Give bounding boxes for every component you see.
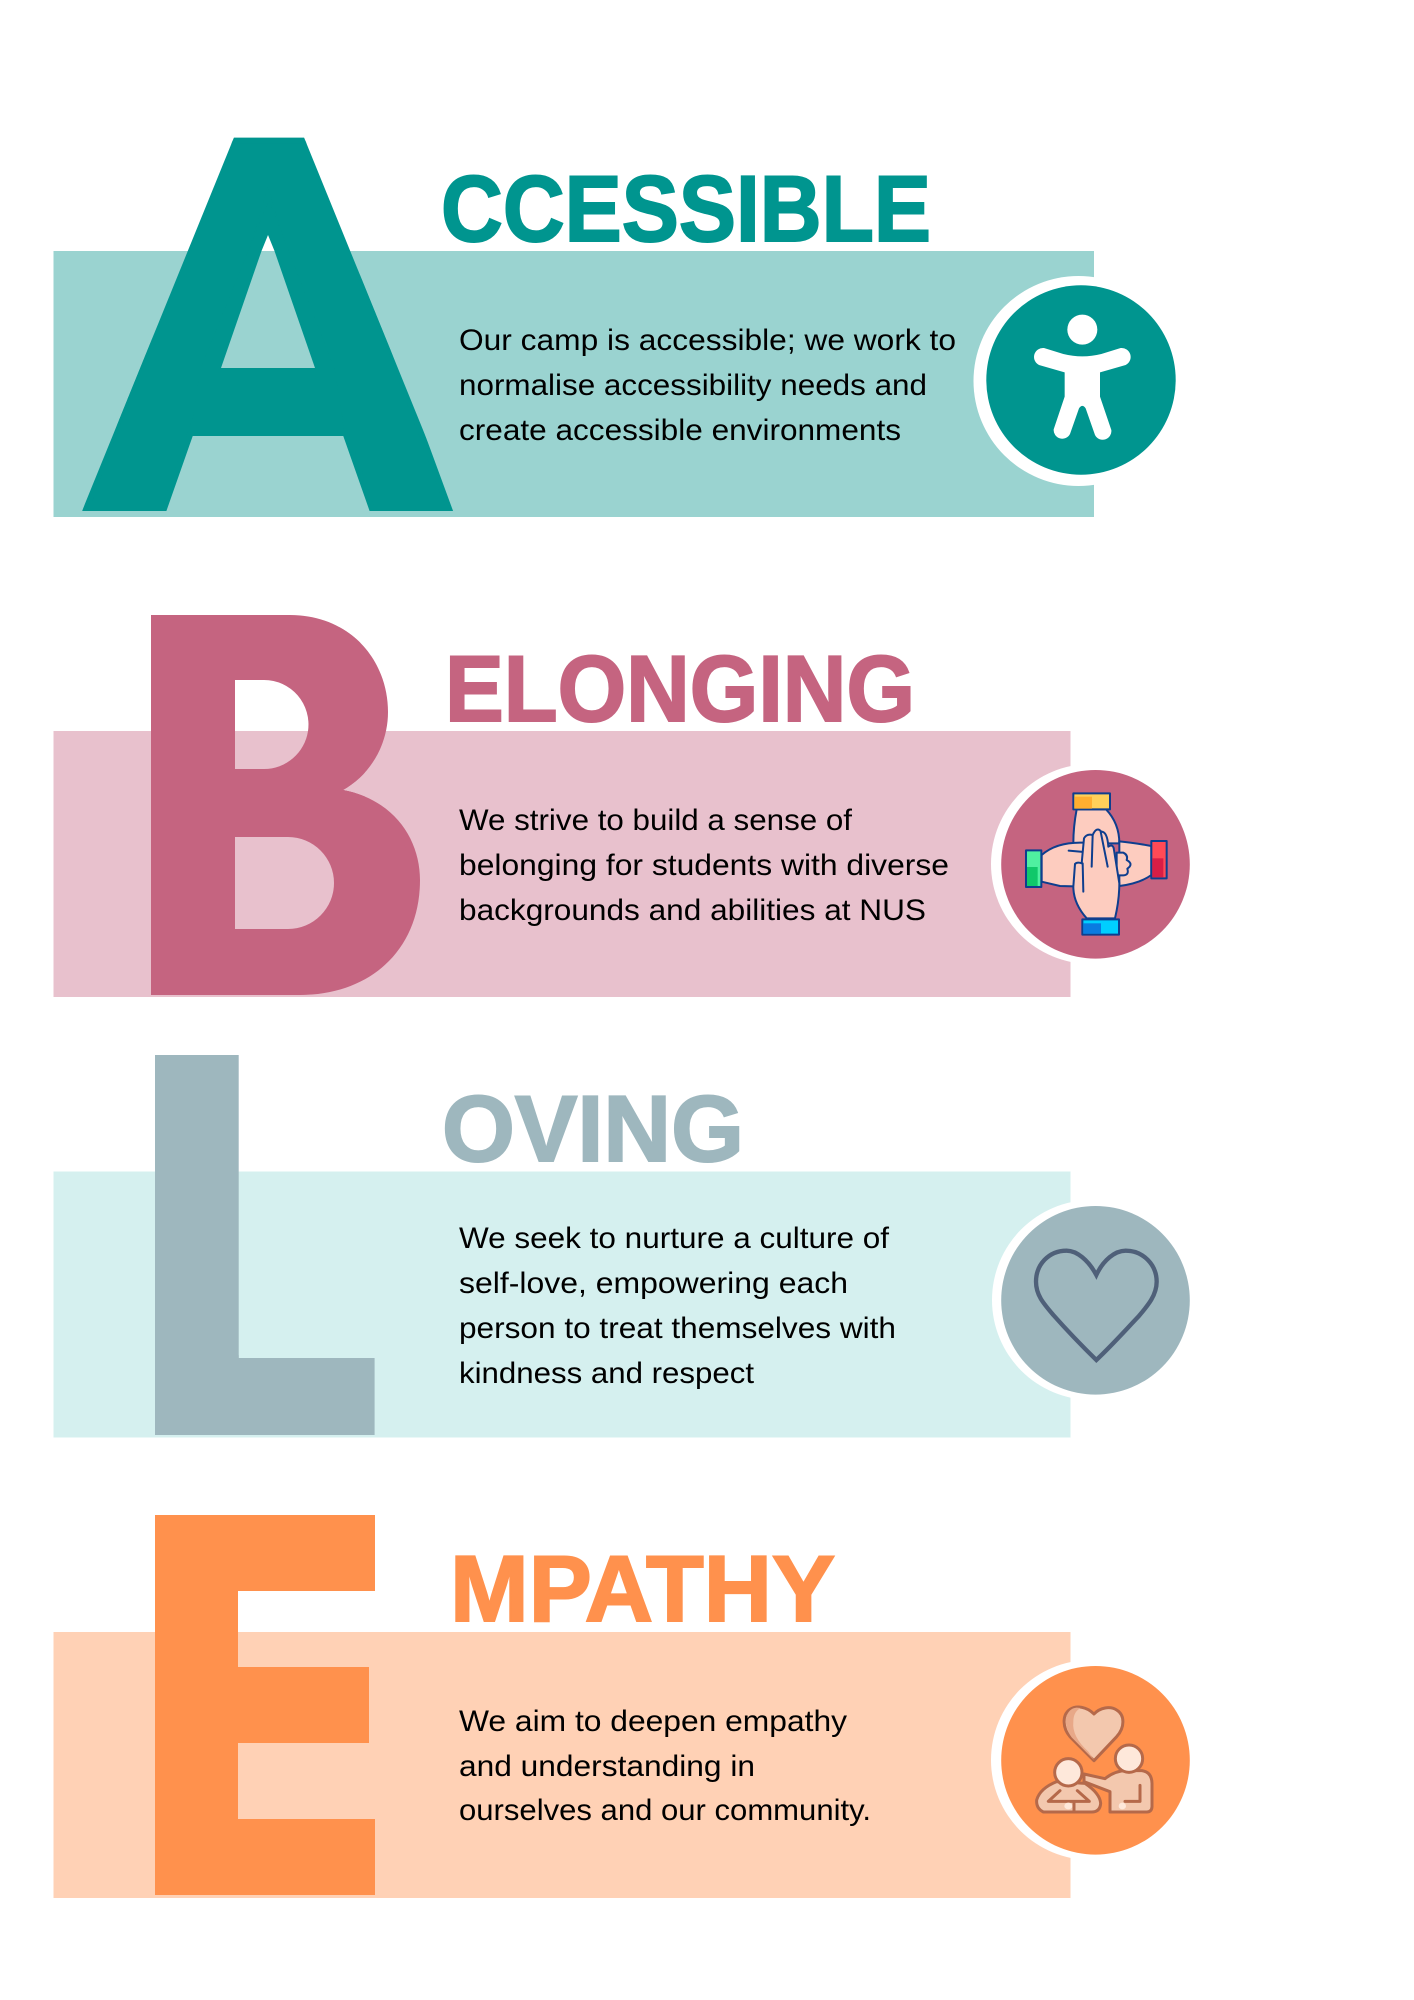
big letter B: B [128, 505, 436, 1103]
panel: loving [54, 1055, 1190, 1438]
panel: empathy [54, 1515, 1190, 1898]
big letter L [155, 1055, 375, 1435]
text: loving description: We seek to nurture a culture of [459, 1222, 890, 1255]
text: empathy description: and understanding in [459, 1750, 755, 1783]
right hand [1119, 841, 1151, 886]
icon: accessibility person [974, 276, 1184, 486]
heading: belonging: ELONGING [445, 636, 915, 741]
heading: empathy: MPATHY [450, 1536, 835, 1641]
text: accessible description: create accessible environments [459, 414, 901, 447]
text: loving description: kindness and respect [459, 1357, 755, 1390]
text: loving description: person to treat themselves with [459, 1312, 896, 1345]
right person [1084, 1771, 1152, 1812]
big letter L: L [137, 953, 378, 1534]
big letter A: A [73, 26, 463, 622]
big letter E [155, 1515, 375, 1895]
text: belonging description: We strive to build a sense of [459, 804, 853, 837]
text: accessible description [459, 324, 956, 447]
panel: accessible [54, 138, 1176, 517]
band: belonging [54, 731, 1070, 997]
icon: heart outline [992, 1200, 1192, 1400]
band: loving [54, 1172, 1070, 1438]
icon: four hands stacked [991, 764, 1191, 964]
text: accessible description: normalise accessibility needs and [459, 369, 927, 402]
panel: belonging [54, 615, 1190, 997]
left person [1037, 1782, 1101, 1812]
big letter E: E [138, 1415, 381, 1995]
bottom hand [1073, 829, 1119, 918]
cuffs [1073, 793, 1110, 809]
big letter B [151, 615, 420, 995]
heading: loving: OVING [442, 1076, 744, 1181]
left hand [1042, 843, 1084, 887]
text: belonging description: belonging for students with diverse [459, 849, 949, 882]
text: loving description [459, 1222, 896, 1390]
text: accessible description: Our camp is accessible; we work to [459, 324, 956, 357]
icon: two people with heart [991, 1660, 1191, 1860]
text: loving description: self-love, empowering each [459, 1267, 848, 1300]
band: accessible [54, 251, 1094, 517]
text: empathy description [459, 1705, 871, 1827]
text: empathy description: ourselves and our community. [459, 1794, 871, 1827]
heart [1064, 1707, 1123, 1761]
text: belonging description [459, 804, 949, 927]
text: belonging description: backgrounds and abilities at NUS [459, 894, 926, 927]
text: empathy description: We aim to deepen empathy [459, 1705, 847, 1738]
heading: accessible: CCESSIBLE [441, 156, 931, 261]
top hand [1073, 809, 1119, 843]
big letter A [82, 138, 453, 511]
band: empathy [54, 1632, 1070, 1898]
